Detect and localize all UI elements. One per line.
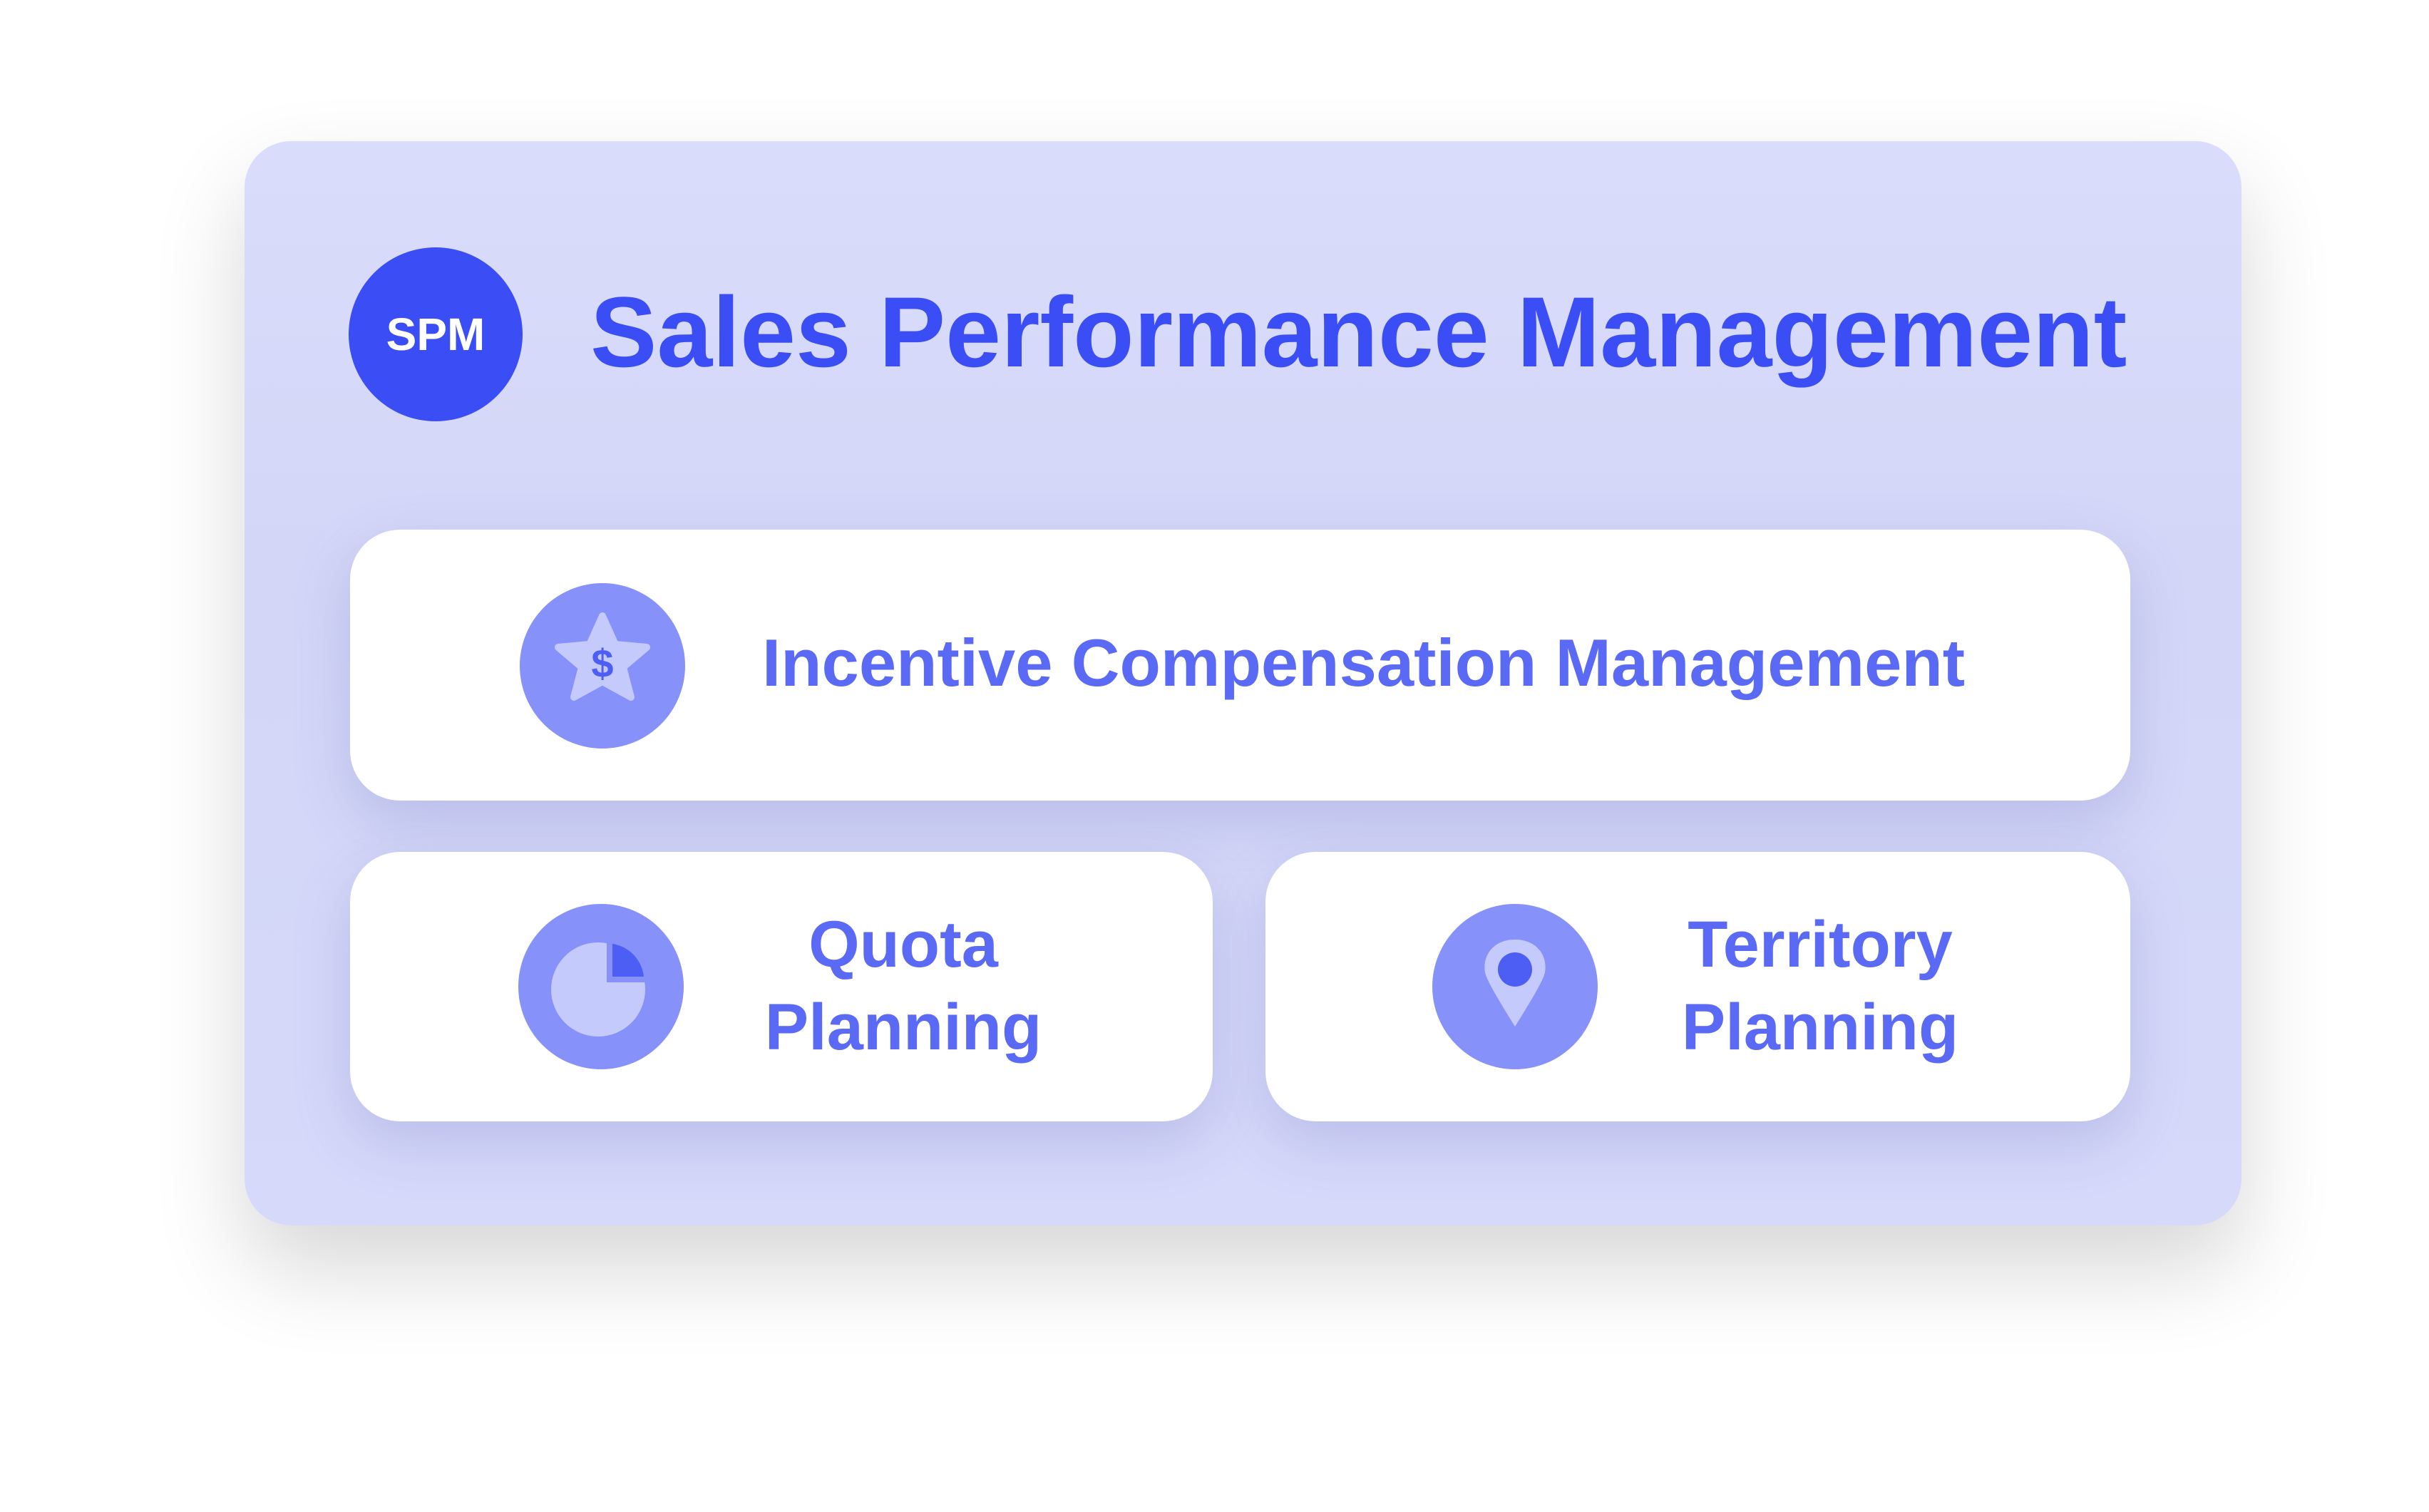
- text: ICM label: Incentive Compensation Management: [762, 625, 1965, 700]
- text: Territory Planning: [1682, 908, 1958, 1064]
- icon: map pin: [1432, 904, 1598, 1069]
- text: Quota Planning: Quota: [808, 908, 998, 981]
- icon: star with dollar: [520, 583, 685, 749]
- text: Quota Planning: Planning: [765, 991, 1042, 1064]
- text: Territory Planning: Territory: [1688, 908, 1953, 981]
- text: Quota Planning: [765, 908, 1042, 1064]
- icon: star with dollar: $: [591, 641, 614, 686]
- text: Territory Planning: Planning: [1682, 991, 1958, 1064]
- panel: main card: [245, 141, 2241, 1225]
- panel: territory planning: [1265, 852, 2130, 1121]
- icon: pie chart: [518, 904, 684, 1069]
- title: Sales Performance Management: [590, 276, 2127, 388]
- panel: quota planning: [350, 852, 1213, 1121]
- icon: SPM badge: SPM: [386, 309, 485, 360]
- icon: SPM badge: [349, 247, 523, 421]
- panel: incentive compensation management: [350, 530, 2130, 801]
